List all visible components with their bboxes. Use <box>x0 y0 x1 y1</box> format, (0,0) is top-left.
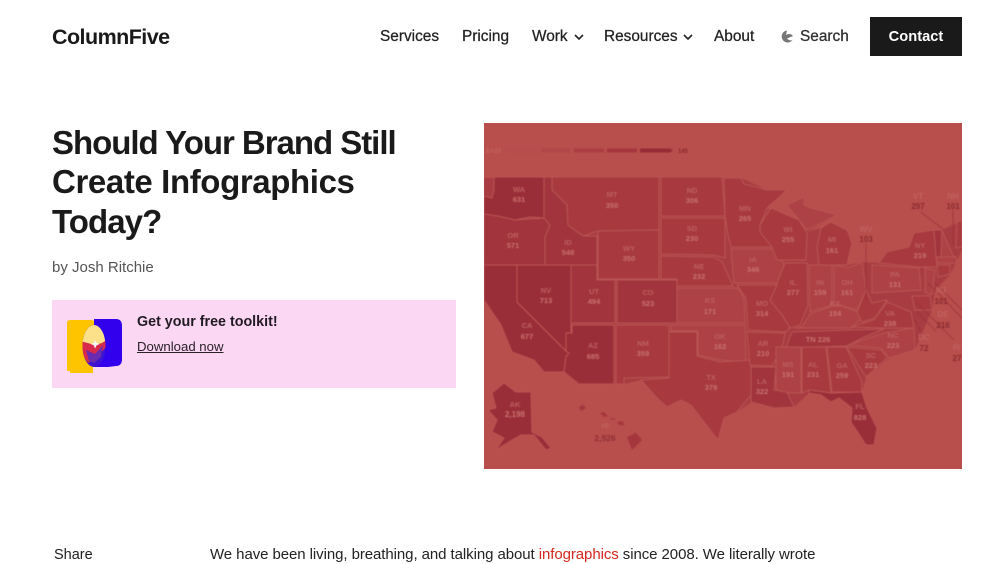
state: UT: 494 <box>588 297 601 306</box>
contiguous land base <box>484 178 962 445</box>
callout link: Download now <box>137 339 224 354</box>
state: WY: WY <box>623 244 635 253</box>
state: MD and DE <box>912 296 932 310</box>
state: MA <box>936 257 957 263</box>
state: IA <box>731 249 784 283</box>
state: ID <box>544 177 597 265</box>
icon: work chevron <box>574 34 584 40</box>
northeast callout labels and leader lines: DE <box>937 310 949 319</box>
state: NY: 219 <box>914 251 926 260</box>
map legend: 145 <box>678 149 689 155</box>
state: ND: 306 <box>686 196 698 205</box>
state: NH <box>941 230 954 257</box>
share label: Share <box>54 547 93 563</box>
icon: toolkit logo <box>67 319 122 373</box>
state: CO: 523 <box>642 299 654 308</box>
state: IL: IL <box>790 278 797 287</box>
northeast callout labels and leader lines: NJ <box>936 286 946 295</box>
state: TN <box>786 329 884 348</box>
state: AZ: AZ <box>588 341 598 350</box>
state: OK <box>671 325 746 362</box>
nav: search: Search <box>800 28 849 45</box>
state: NM <box>616 325 669 384</box>
state: ME <box>956 220 962 248</box>
state: GA: 259 <box>836 371 848 380</box>
state: MI lower: MI <box>828 235 836 244</box>
state: KS: KS <box>705 296 715 305</box>
state: ND <box>661 177 725 216</box>
state: PA: PA <box>890 270 901 279</box>
state: WA <box>484 177 544 220</box>
state: KS <box>677 288 745 323</box>
article intro text: We have been living, breathing, and talking about infographics since 2008. We literally wrote <box>210 546 815 563</box>
state: MO: 314 <box>756 309 769 318</box>
icon: moon <box>782 30 793 42</box>
state: NY: NY <box>915 241 925 250</box>
northeast callout labels and leader lines: WV <box>860 225 873 234</box>
state: NE: NE <box>694 262 704 271</box>
state: MS: 191 <box>782 370 794 379</box>
state: OR <box>484 214 550 265</box>
state: NC <box>848 328 915 358</box>
state: VA: VA <box>885 309 896 318</box>
state: HI <box>579 405 642 450</box>
northeast callout labels and leader lines: DC <box>918 333 930 342</box>
northeast callout labels and leader lines: 101 <box>934 297 948 306</box>
state: MS: MS <box>782 360 794 369</box>
state: GA <box>827 347 862 392</box>
state: NM: 359 <box>637 349 649 358</box>
state: FL: 828 <box>854 413 866 422</box>
state: NE <box>661 256 733 286</box>
state: VA <box>851 302 914 328</box>
state map <box>484 177 962 450</box>
state: WA: 631 <box>513 195 525 204</box>
state: NV: 713 <box>540 296 552 305</box>
state: KS: 171 <box>704 307 716 316</box>
northeast callout labels and leader lines: 103 <box>859 235 873 244</box>
state: FL: FL <box>855 402 865 411</box>
navigation bar <box>380 17 962 56</box>
state: AK: 2,198 <box>505 410 526 419</box>
state: IN <box>809 265 832 312</box>
northeast callout labels and leader lines: 72 <box>920 344 929 353</box>
title <box>52 124 396 240</box>
state: ND: ND <box>687 186 698 195</box>
state: CA <box>484 265 569 372</box>
state: WI: WI <box>783 225 793 234</box>
state: KY: KY <box>830 299 840 308</box>
button: contact <box>870 17 962 56</box>
state: NV: NV <box>541 286 551 295</box>
state: NC: NC <box>888 331 899 340</box>
state: AL: AL <box>808 360 818 369</box>
northeast callout labels and leader lines <box>859 192 962 363</box>
state: AZ <box>564 325 614 384</box>
state: MN: MN <box>739 204 751 213</box>
panel: map image with red overlay <box>484 123 962 469</box>
state: TX: TX <box>706 373 716 382</box>
state: TN: TN 226 <box>806 335 830 344</box>
state: MI lower: 161 <box>826 246 838 255</box>
northeast callout labels and leader lines: VT <box>913 192 923 201</box>
state: SC: 223 <box>865 361 877 370</box>
state: LA: LA <box>757 377 768 386</box>
state: MT: 350 <box>606 201 618 210</box>
northeast callout labels and leader lines: 27 <box>953 354 962 363</box>
state: WI <box>760 208 807 260</box>
state: SD: 230 <box>686 234 698 243</box>
state: CA: CA <box>522 321 533 330</box>
state: IA: 346 <box>747 265 759 274</box>
button: contact: Contact <box>889 29 943 45</box>
state: OH: OH <box>841 278 853 287</box>
state: MT: MT <box>607 190 618 199</box>
state: ID: ID <box>564 238 572 247</box>
state: OK: 162 <box>714 342 726 351</box>
state: AR <box>747 332 785 366</box>
state: CO <box>617 280 677 323</box>
state: OK: OK <box>714 332 726 341</box>
state: IA: IA <box>749 255 757 264</box>
state: AL: 231 <box>807 370 819 379</box>
state: SD <box>661 218 725 258</box>
state: TX <box>641 332 751 440</box>
state: AR: AR <box>758 339 769 348</box>
state: KY <box>795 299 862 328</box>
state: IL: 277 <box>787 288 799 297</box>
nav: pricing: Pricing <box>462 28 509 45</box>
title: Should Your Brand Still <box>52 124 396 161</box>
state: GA: GA <box>836 361 848 370</box>
logo: ColumnFive <box>52 25 170 49</box>
state: IL <box>770 263 808 328</box>
state: AK: AK <box>510 400 521 409</box>
northeast callout labels and leader lines: RI <box>953 343 961 352</box>
northeast callout labels and leader lines: 216 <box>936 321 950 330</box>
state: OH <box>834 262 866 310</box>
state: AL <box>802 347 831 393</box>
state: NY <box>879 230 937 267</box>
state: WV <box>857 290 887 322</box>
state: AK <box>488 383 551 450</box>
callout heading: Get your free toolkit! <box>137 314 278 330</box>
state: OR: OR <box>507 231 519 240</box>
nav: work: Work <box>532 28 568 45</box>
state: OH: 161 <box>841 288 853 297</box>
state: MI lower <box>817 222 852 265</box>
state: AZ: 685 <box>587 352 599 361</box>
state: SD: SD <box>687 224 698 233</box>
state: CT <box>937 265 950 277</box>
state: CO: CO <box>642 288 654 297</box>
state: IN: IN <box>816 278 824 287</box>
panel: toolkit callout <box>52 300 456 388</box>
state: ID: 548 <box>562 248 574 257</box>
state: MI upper <box>787 197 837 230</box>
icon: resources chevron <box>684 34 692 40</box>
northeast callout labels and leader lines: 297 <box>911 202 925 211</box>
state: NJ area <box>925 268 935 295</box>
state: NM: NM <box>637 339 649 348</box>
state: UT <box>571 265 615 323</box>
state: SC <box>847 347 887 377</box>
state: PA: 131 <box>889 280 901 289</box>
state: MS <box>776 347 801 393</box>
northeast callout labels and leader lines: NH <box>947 192 959 201</box>
state: MO: MO <box>756 299 768 308</box>
state: TX: 379 <box>705 383 717 392</box>
title: Today? <box>52 203 161 240</box>
state: HI: HI <box>601 421 609 430</box>
state: MN: 265 <box>739 214 751 223</box>
state: FL <box>809 390 877 445</box>
nav: services: Services <box>380 28 439 45</box>
nav: about: About <box>714 28 754 45</box>
state: WI: 255 <box>782 235 794 244</box>
state: LA <box>751 367 794 408</box>
state: OR: 571 <box>507 241 519 250</box>
state: CA: 677 <box>521 332 533 341</box>
state: WY: 350 <box>623 254 635 263</box>
state: NE: 232 <box>693 272 705 281</box>
state: WY <box>598 230 659 279</box>
map legend <box>482 148 689 155</box>
state: VA: 238 <box>884 319 896 328</box>
state: VT <box>934 230 942 257</box>
byline: by Josh Ritchie <box>52 259 154 276</box>
nav: resources: Resources <box>604 28 678 45</box>
northeast callout labels and leader lines: 101 <box>946 202 960 211</box>
state: LA: 322 <box>756 387 768 396</box>
state: SC: SC <box>866 351 877 360</box>
state: MN <box>724 178 787 247</box>
state: NC: 223 <box>887 341 899 350</box>
state: WA: WA <box>513 185 526 194</box>
state: AR: 210 <box>757 349 769 358</box>
title: Create Infographics <box>52 163 354 200</box>
state: IN: 159 <box>814 288 826 297</box>
state: NV <box>517 265 571 351</box>
state: MO <box>737 285 790 332</box>
state: MT <box>552 177 659 236</box>
state: HI: 2,926 <box>594 433 616 443</box>
state: UT: UT <box>589 287 599 296</box>
state: PA <box>872 265 921 293</box>
state: KY: 154 <box>829 309 842 318</box>
